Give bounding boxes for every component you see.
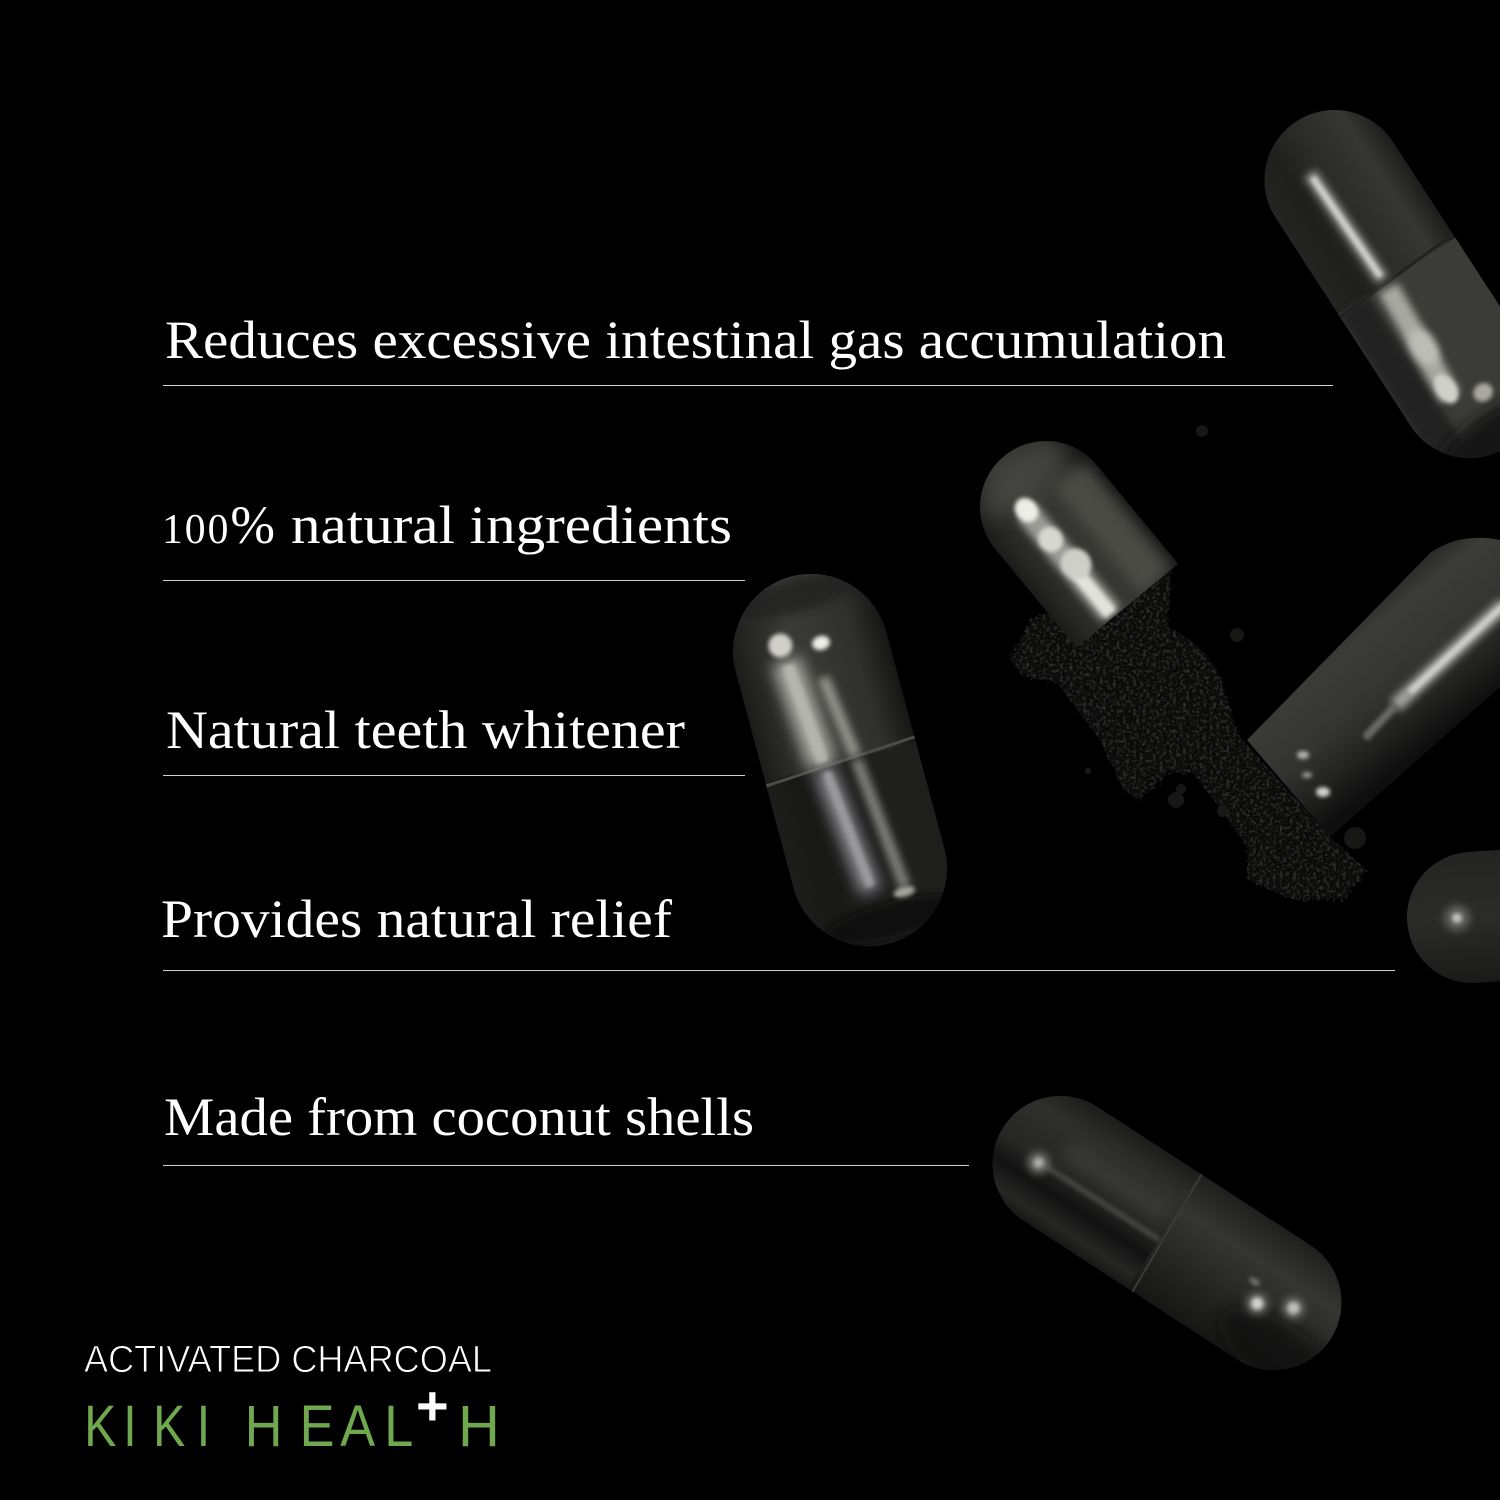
brand logo [84, 1374, 500, 1459]
brand logo: HEAL [245, 1393, 413, 1459]
capsule: center [733, 574, 947, 946]
benefit: gas accumulation: Reduces excessive intestinal gas accumulation [165, 310, 1226, 370]
capsule: top right [1264, 110, 1500, 458]
benefit: natural relief: Provides natural relief [161, 889, 672, 949]
brand logo: + [416, 1374, 449, 1437]
benefit: natural ingredients: 100% [162, 495, 275, 555]
powder: spilled charcoal [1010, 563, 1367, 900]
capsule: right edge [1403, 841, 1500, 987]
powder: loose grains [1085, 425, 1366, 849]
product name: ACTIVATED CHARCOAL [84, 1339, 492, 1381]
capsule: bottom [992, 1096, 1342, 1370]
benefit: natural ingredients [162, 495, 745, 581]
capsule: open half, right [1240, 530, 1500, 850]
benefit: coconut shells: Made from coconut shells [164, 1087, 754, 1147]
benefit: teeth whitener: Natural teeth whitener [166, 700, 685, 760]
brand logo: KIKI [84, 1395, 210, 1459]
capsule: open half, upper [980, 441, 1178, 648]
benefit: natural ingredients: natural ingredients [291, 495, 732, 555]
brand logo: H [458, 1394, 500, 1459]
